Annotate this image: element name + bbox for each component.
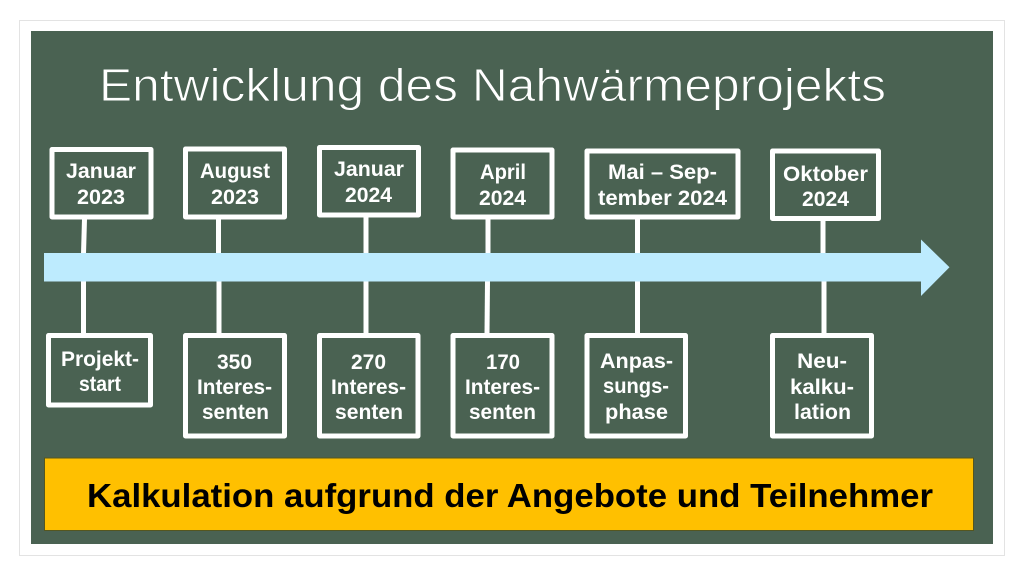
- event box: 270 Interessenten: senten: [335, 401, 403, 424]
- date box: Januar 2024: 2024: [345, 184, 392, 207]
- event box: 350 Interessenten: senten: [202, 401, 269, 424]
- event box: 270 Interessenten: Interes-: [331, 376, 406, 399]
- event box: Neukalkulation: [772, 336, 872, 436]
- date box: Januar 2023: 2023: [77, 186, 125, 209]
- event box: 350 Interessenten: 350: [217, 351, 252, 374]
- date box: Oktober 2024: 2024: [802, 188, 849, 211]
- event box: Projektstart: Projekt-: [61, 348, 139, 371]
- date box: August 2023: August: [200, 160, 270, 183]
- event box: Neukalkulation: Neu-: [797, 350, 847, 373]
- event box: Neukalkulation: lation: [794, 401, 851, 424]
- date box: Oktober 2024: [772, 151, 878, 218]
- event box: 350 Interessenten: Interes-: [197, 376, 272, 399]
- event box: 270 Interessenten: 270: [351, 351, 386, 374]
- title: Entwicklung des Nahwärmeprojekts: [99, 59, 886, 111]
- date box: Mai – September 2024: tember 2024: [598, 187, 727, 210]
- event box: Anpassungsphase: Anpas-: [600, 350, 673, 373]
- event box: Anpassungsphase: phase: [605, 401, 668, 424]
- connector lines: [84, 217, 824, 334]
- date box: Mai – September 2024: Mai – Sep-: [608, 161, 717, 184]
- date box: Januar 2024: Januar: [334, 158, 404, 181]
- event box: 350 Interessenten: [186, 336, 284, 436]
- callout: calculation banner: Kalkulation aufgrund der Angebote und Teilnehmer: [87, 477, 933, 514]
- date box: April 2024: [453, 150, 552, 217]
- date box: Januar 2024: [320, 148, 418, 215]
- date box: Januar 2023: Januar: [66, 160, 136, 183]
- event box: 170 Interessenten: [453, 336, 552, 436]
- date box: Januar 2023: [52, 150, 151, 217]
- date box: Mai – September 2024: [587, 151, 738, 217]
- arrow: timeline: [44, 240, 950, 296]
- date box: Oktober 2024: Oktober: [783, 163, 868, 186]
- date box: August 2023: 2023: [211, 186, 259, 209]
- event box: 170 Interessenten: 170: [486, 351, 520, 374]
- date box: August 2023: [186, 149, 284, 217]
- event box: Projektstart: [48, 336, 150, 405]
- event box: Anpassungsphase: sungs-: [603, 375, 669, 398]
- callout: calculation banner: [44, 458, 974, 530]
- date box: April 2024: 2024: [479, 187, 526, 210]
- event box: Neukalkulation: kalku-: [790, 376, 854, 399]
- date box: April 2024: April: [480, 161, 526, 184]
- event box: 270 Interessenten: [320, 336, 418, 436]
- event box: Anpassungsphase: [587, 336, 686, 436]
- event box: 170 Interessenten: senten: [469, 401, 536, 424]
- event box: 170 Interessenten: Interes-: [465, 376, 540, 399]
- event box: Projektstart: start: [79, 373, 121, 396]
